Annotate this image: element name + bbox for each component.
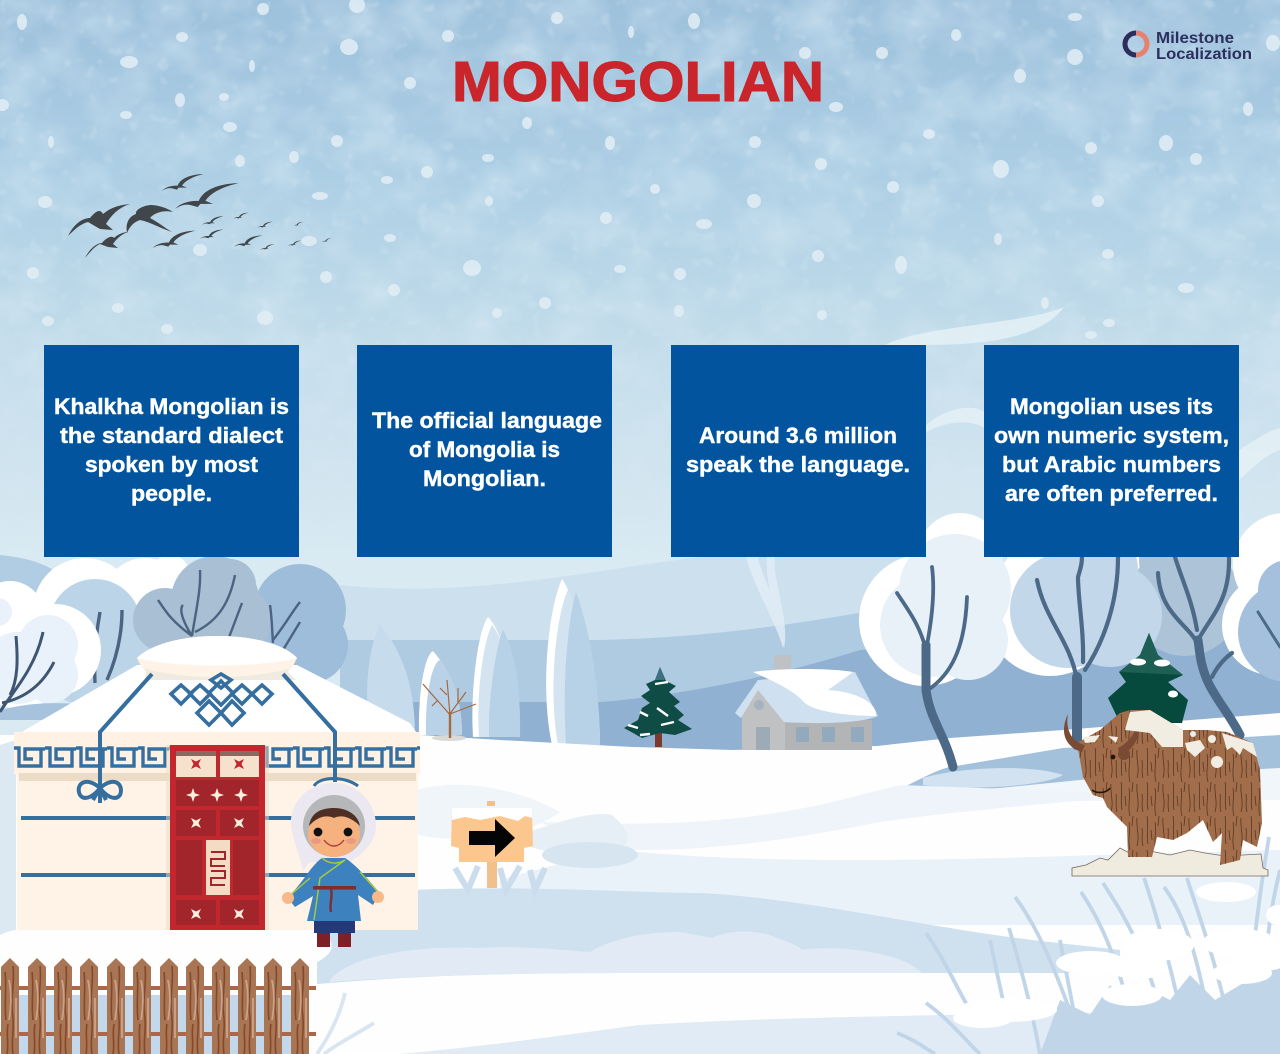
tree C grey-blue [1123,557,1150,620]
distant hills [0,555,1280,780]
yak eye and muzzle [1111,755,1115,759]
cypress trees [367,579,600,745]
blue drift [317,888,1120,984]
panel text: Khalkha Mongolian is [54,394,289,419]
panel text: of Mongolia is [409,437,560,462]
yak body [1077,710,1262,865]
icon: yurt [0,636,420,930]
front-left tree foliage [0,581,101,709]
panel text: own numeric system, [994,423,1229,448]
yurt roof [0,665,420,745]
child face [308,811,360,857]
child hood [291,783,376,870]
sign arrow [469,819,515,857]
yurt door [166,745,269,930]
panel: numeric system [984,345,1239,557]
tree white backing [33,555,190,662]
yurt greek key band [14,746,420,769]
snow ground [0,713,1280,1054]
panel text: The official language [372,408,602,433]
child hands [282,892,294,904]
drift behind yurt left edge [0,927,332,1054]
child coat [287,858,380,921]
panel text: but Arabic numbers [1002,452,1221,477]
snow hump near sign [417,785,560,839]
background: wind swooshes [885,307,1280,480]
blue ridge band [893,735,1280,792]
tree far right of group [250,564,348,685]
snow on yak [1083,710,1257,768]
logo wordmark [1156,30,1252,63]
pale blue snow band [500,850,1280,973]
panel text: Mongolian uses its [1010,394,1213,419]
yak fur strokes [1077,710,1262,865]
right tree trunks [897,557,1280,767]
bottom pale zone [400,1010,1280,1054]
left snowy trees [0,555,348,720]
background: large snowflakes [0,0,1280,339]
front-left tree branches [0,632,54,712]
panel text: speak the language. [686,452,910,477]
flock of birds [68,174,331,258]
tree B pale blue [984,540,1116,676]
icon: bare tree [423,680,476,741]
logo: Milestone Localization [1125,30,1252,63]
panel text: Around 3.6 million [699,423,897,448]
panel text: spoken by most [85,452,259,477]
icon: child in winter coat [282,783,384,947]
right snowy trees [859,513,1280,686]
panel text [372,408,602,491]
child boots [317,932,351,947]
tree D far right [1222,513,1280,675]
yak horns [1064,714,1140,760]
icon: yak and small pine [1064,633,1268,876]
grass and snow lumps [317,837,1280,1054]
yurt wall [17,773,418,930]
logo icon ring [1125,33,1147,55]
logo wordmark: Milestone [1156,30,1234,47]
panel text: the standard dialect [60,423,284,448]
logo wordmark: Localization [1156,46,1252,63]
panel text: people. [131,481,212,506]
left pale edge [0,740,16,935]
left tree branches [82,570,300,684]
background: snow haze texture [0,0,1280,376]
panel: Khalkha dialect [44,345,299,557]
panel: number of speakers [671,345,926,557]
panel text [686,423,910,477]
icon: cottage [735,655,878,750]
small pine behind yak [1108,633,1188,723]
title: MONGOLIAN [452,50,824,114]
panel text: Mongolian. [423,466,546,491]
panel text [54,394,289,506]
snow mound [1072,848,1268,876]
grey-blue tree [133,556,272,672]
icon: pine tree [624,667,692,747]
panel: official language [357,345,612,557]
pale band [540,785,1280,850]
panel text [994,394,1229,506]
icon: wooden fence [0,958,316,1054]
yurt ropes [21,674,415,875]
yurt cap [137,636,297,680]
icon: wooden arrow sign [451,801,533,888]
tree A white [859,513,1002,686]
pale blue tree [49,579,153,703]
pale mound on drift [330,932,922,982]
panel text: are often preferred. [1005,481,1218,506]
smoke [746,557,785,648]
yurt roof knot pattern [171,674,272,725]
